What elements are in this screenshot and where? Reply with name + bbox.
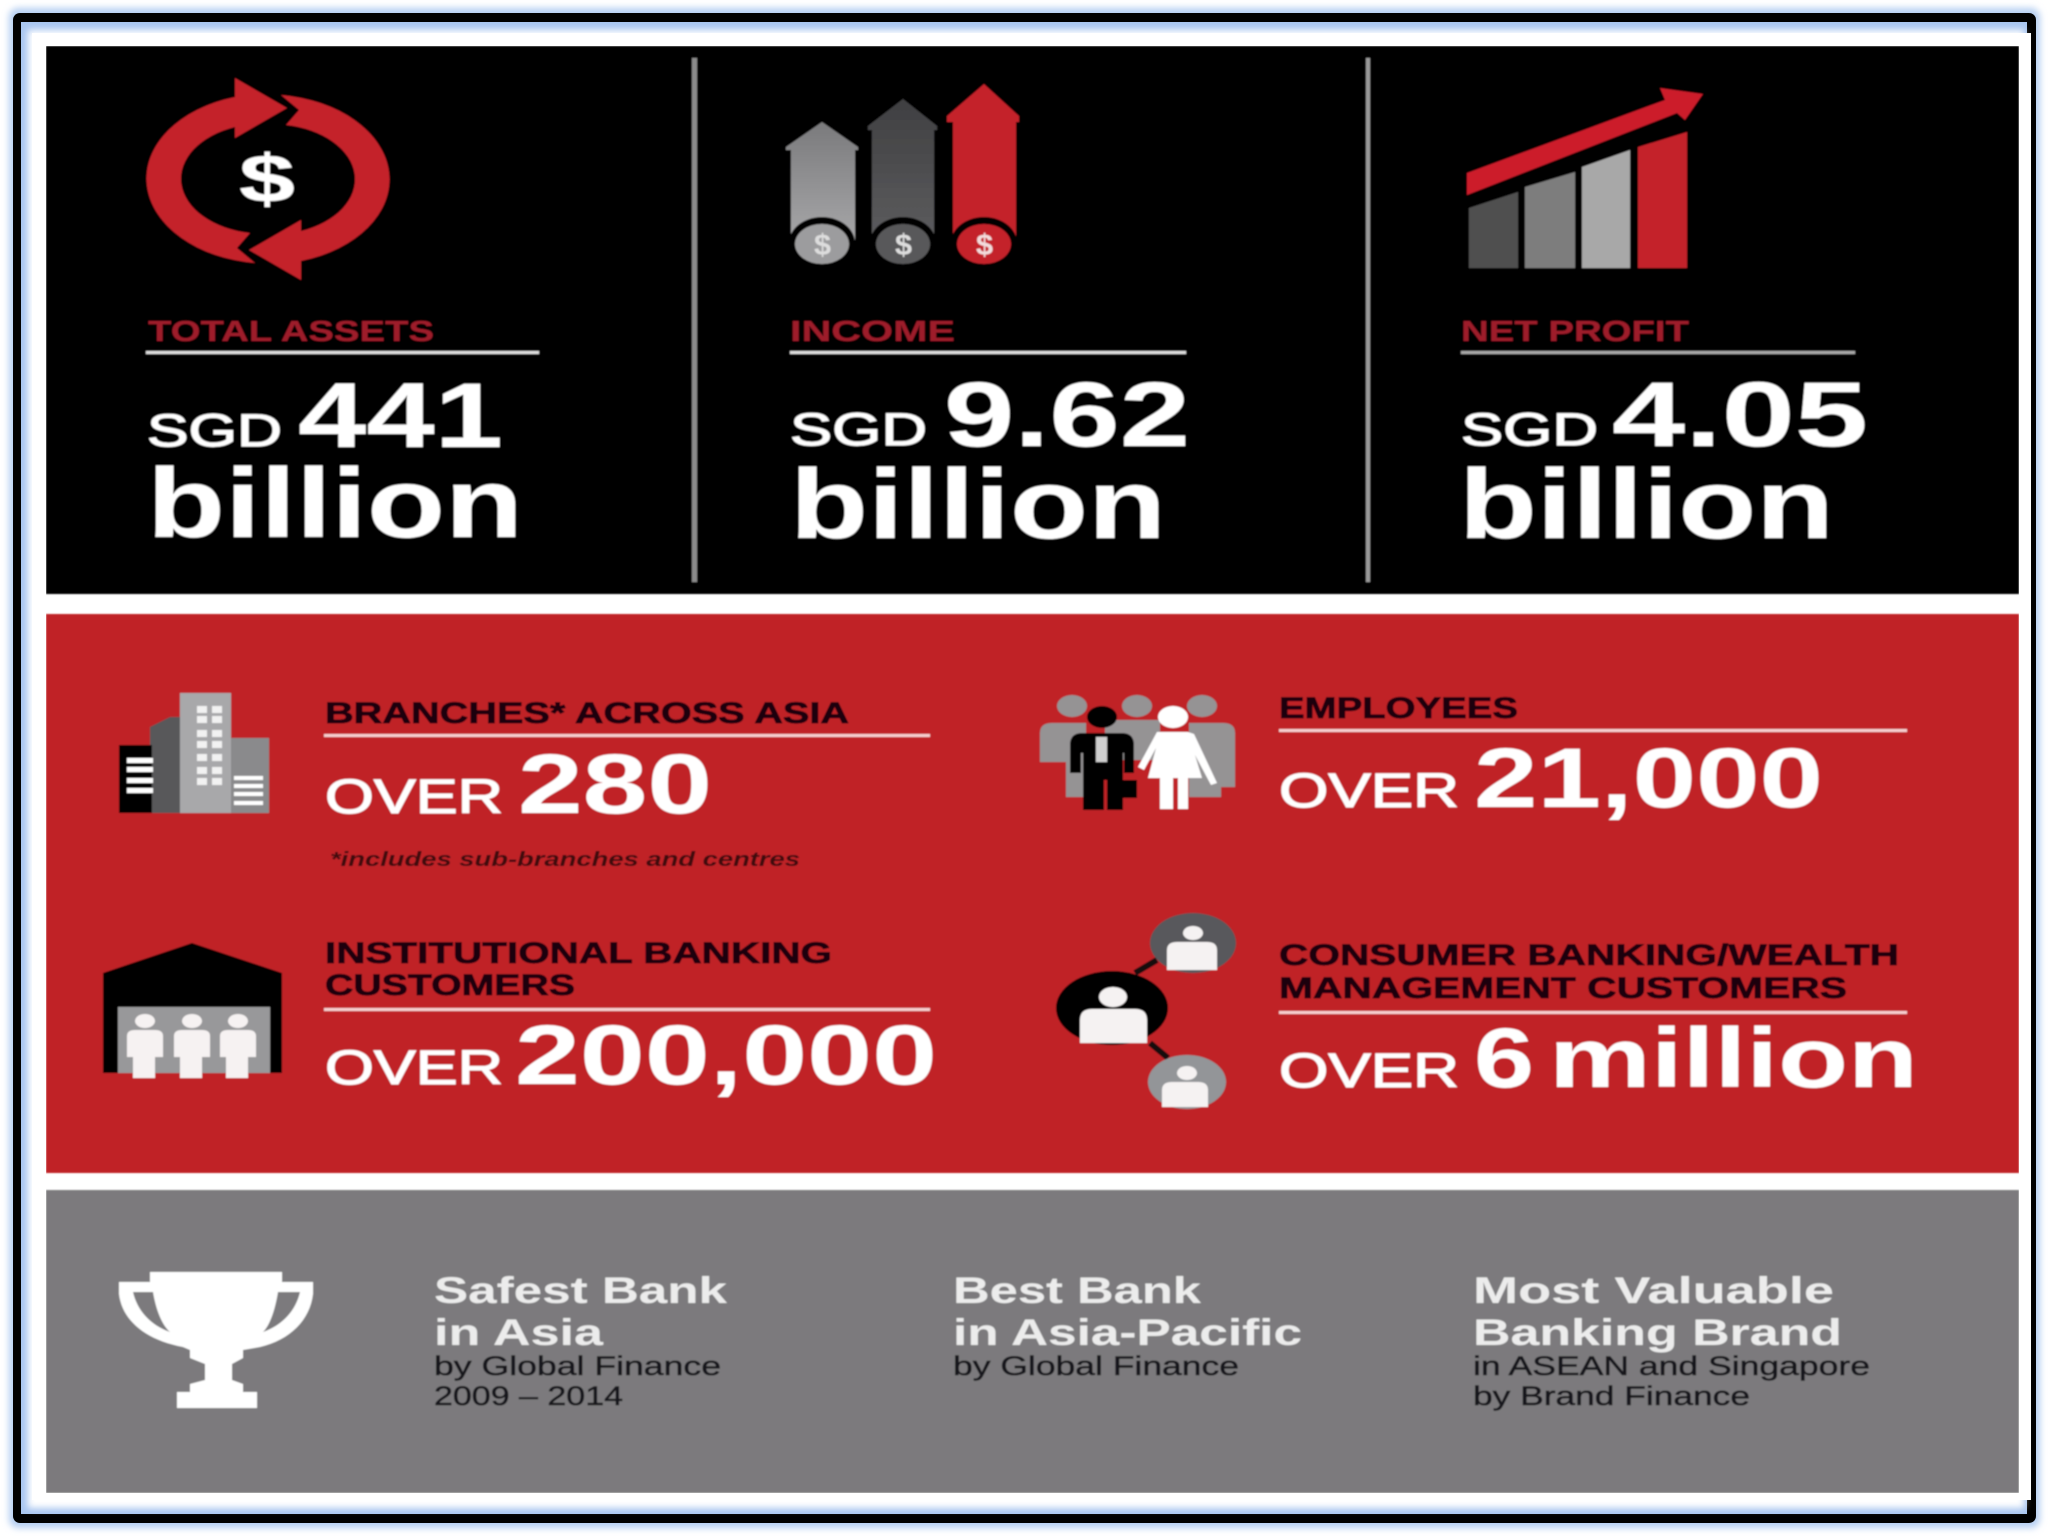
figure: employees value: OVER [1279, 765, 1459, 818]
figure: total assets value: SGD [147, 405, 282, 456]
award: most valuable brand [1473, 1270, 1870, 1411]
footnote: branches: *includes sub-branches and centres [330, 849, 800, 871]
figure: branches value: OVER [325, 771, 503, 824]
figure: net profit value [1459, 364, 1868, 559]
figure: total assets value [147, 365, 523, 558]
figure: institutional customers value: OVER [325, 1042, 503, 1095]
award: most valuable brand: by Brand Finance [1473, 1381, 1750, 1411]
icon: circular arrows with dollar sign [146, 78, 390, 280]
heading: consumer banking customers: MANAGEMENT CUSTOMERS [1279, 972, 1847, 1005]
award: safest bank [434, 1270, 728, 1411]
icon: three rising arrows with coins: $ [895, 229, 912, 262]
figure: employees value [1279, 731, 1823, 825]
award: safest bank: by Global Finance [434, 1351, 721, 1381]
icon: warehouse with people [103, 943, 282, 1078]
figure: income value: SGD [790, 404, 927, 455]
icon: three rising arrows with coins: $ [814, 229, 831, 262]
heading: income: INCOME [790, 316, 955, 348]
icon: three rising arrows with coins: $ [976, 229, 993, 262]
figure: income value: 9.62 [944, 364, 1190, 466]
figure: net profit value: billion [1459, 449, 1834, 559]
figure: net profit value: 4.05 [1612, 364, 1868, 466]
award: safest bank: Safest Bank [434, 1270, 728, 1311]
heading: consumer banking customers: CONSUMER BANKING/WEALTH [1279, 939, 1899, 972]
heading: branches: BRANCHES* ACROSS ASIA [325, 697, 849, 730]
figure: net profit value: SGD [1461, 404, 1598, 455]
award: most valuable brand: Banking Brand [1473, 1312, 1842, 1353]
award: most valuable brand: in ASEAN and Singapore [1473, 1351, 1870, 1381]
heading: total assets: TOTAL ASSETS [148, 316, 434, 348]
figure: institutional customers value [325, 1008, 937, 1102]
award: safest bank: in Asia [434, 1312, 604, 1353]
figure: consumer customers value: 6 [1474, 1011, 1534, 1105]
award: best bank: in Asia-Pacific [953, 1312, 1302, 1353]
heading: institutional banking customers: CUSTOMERS [325, 969, 575, 1002]
panel: awards [46, 1190, 2019, 1493]
icon: rising bar chart with arrow [1467, 88, 1703, 268]
icon: employees group [1040, 695, 1235, 810]
icon: circular arrows with dollar sign: $ [239, 141, 295, 217]
panel: financial results [46, 46, 2019, 594]
figure: income value: billion [790, 449, 1166, 559]
figure: income value [790, 364, 1190, 559]
figure: institutional customers value: 200,000 [515, 1008, 937, 1102]
figure: branches value: 280 [518, 737, 712, 831]
figure: total assets value: billion [147, 448, 523, 558]
icon: three rising arrows with coins [786, 84, 1019, 269]
figure: consumer customers value [1279, 1011, 1918, 1105]
heading: employees: EMPLOYEES [1279, 692, 1518, 725]
award: best bank: by Global Finance [953, 1351, 1239, 1381]
heading: consumer banking customers [1279, 939, 1899, 1005]
figure: consumer customers value: million [1549, 1011, 1918, 1105]
award: most valuable brand: Most Valuable [1473, 1270, 1834, 1311]
heading: institutional banking customers: INSTITUTIONAL BANKING [325, 937, 832, 970]
icon: trophy [119, 1272, 313, 1408]
figure: consumer customers value: OVER [1279, 1045, 1459, 1098]
icon: office buildings [119, 693, 269, 813]
award: safest bank: 2009 – 2014 [434, 1381, 623, 1411]
panel: network and customers [46, 614, 2019, 1173]
icon: connected customers network [1056, 913, 1236, 1109]
award: best bank: Best Bank [953, 1270, 1202, 1311]
figure: total assets value: 441 [298, 365, 503, 467]
award: best bank [953, 1270, 1302, 1381]
heading: net profit: NET PROFIT [1461, 316, 1689, 348]
figure: branches value [325, 737, 712, 831]
heading: institutional banking customers [325, 937, 832, 1002]
figure: employees value: 21,000 [1474, 731, 1823, 825]
